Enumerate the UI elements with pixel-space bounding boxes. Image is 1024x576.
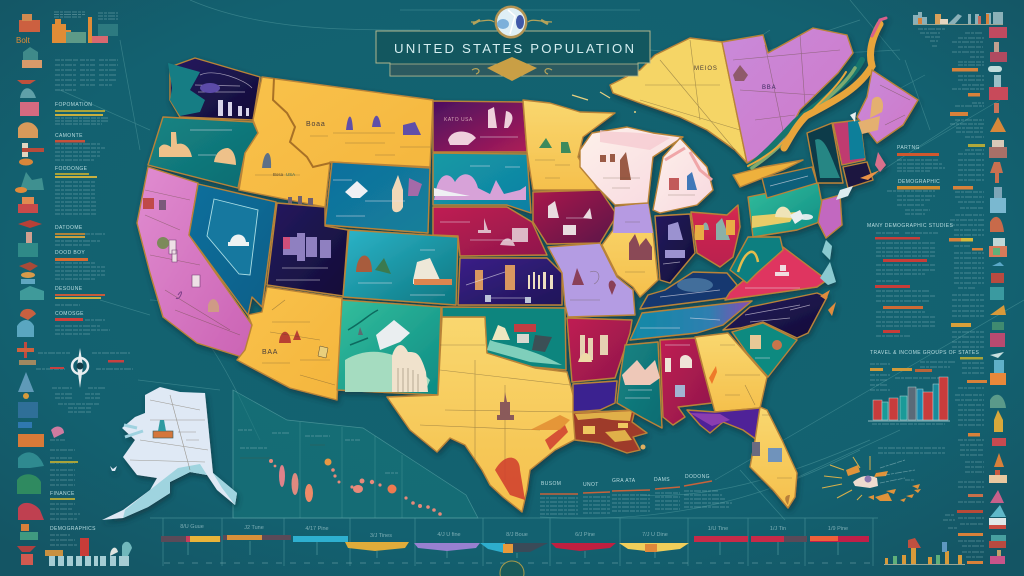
- icon: white block: [989, 518, 1006, 529]
- lower-right mini bars: [884, 515, 965, 564]
- icon: pink building: [989, 27, 1007, 38]
- map of the states: [137, 18, 918, 512]
- icon: blue peak: [18, 372, 34, 392]
- diagonal statistics text: [540, 474, 732, 514]
- timeline labels: 1/9 Pine: [828, 526, 848, 532]
- timeline labels: 8/U Guue: [180, 524, 204, 530]
- Connecticut: [843, 162, 873, 188]
- North Dakota label: KATO USA: [444, 117, 473, 123]
- text block 9: [50, 526, 96, 545]
- Kansas: [458, 258, 562, 305]
- top skyline chart: [52, 12, 118, 43]
- Kentucky: [640, 272, 737, 309]
- text block 2: [55, 133, 105, 160]
- Nevada: [189, 184, 276, 315]
- Northeastern pink region: [722, 28, 853, 163]
- main heading: UNITED STATES POPULATION: [394, 41, 634, 56]
- panel: Puerto Rico cluster: [822, 448, 945, 502]
- title diamond ornament: [487, 57, 537, 81]
- icon: olive and teal: [20, 524, 38, 540]
- icon: red orange: [990, 217, 1004, 232]
- text block 4: DATOOME: [55, 225, 83, 231]
- cluster caption: [878, 448, 945, 453]
- timeline labels: 4/J U fine: [437, 532, 461, 538]
- note bar 2: [897, 186, 940, 190]
- Lake island: [790, 210, 804, 224]
- text block 2: CAMONTE: [55, 133, 83, 139]
- Arizona: [237, 287, 342, 400]
- demographics table: [875, 233, 938, 336]
- text block 4: [55, 225, 105, 245]
- text block 8: [50, 491, 80, 519]
- icon: small stack: [994, 103, 999, 113]
- orange highlight tags: [949, 68, 987, 564]
- icon: orange saucer: [19, 158, 33, 166]
- icon: orange mound: [990, 117, 1006, 132]
- note heading 2: DEMOGRAPHIC: [898, 179, 940, 185]
- northern label: MEIOS: [694, 66, 718, 72]
- Oregon: [148, 117, 258, 188]
- title globe: [494, 6, 528, 38]
- Vermont dark panel: [807, 123, 843, 183]
- left text column: [36, 12, 133, 566]
- diagonal statistics text: GRA ATA: [612, 478, 636, 484]
- Washington: [168, 58, 260, 120]
- icon: pink and green: [989, 238, 1007, 257]
- Illinois: [602, 203, 658, 297]
- icon: teal and red: [989, 535, 1006, 548]
- Minnesota: [523, 100, 615, 190]
- timeline labels: 4/17 Pine: [305, 526, 329, 532]
- Idaho and Montana: Bosa: [273, 172, 284, 177]
- Montana label: Boaa: [306, 121, 326, 128]
- Florida panhandle: [687, 408, 760, 440]
- Tennessee: [630, 301, 752, 340]
- New York strip: [733, 160, 817, 198]
- icon: pink peak: [990, 490, 1004, 503]
- bars: [873, 377, 948, 420]
- Colorado: [343, 230, 458, 305]
- top-right skyline: [913, 12, 1003, 46]
- compass rose: [72, 348, 88, 388]
- icon: mixed colour block: [18, 452, 44, 468]
- text block 1: FOPOMATION: [55, 102, 92, 108]
- North Carolina: [723, 293, 827, 338]
- icon: red stack: [18, 197, 38, 213]
- Great Lakes island details: [572, 92, 636, 113]
- Alaska label: [153, 420, 199, 440]
- icon: red saucer: [17, 80, 36, 84]
- bottom seal: [500, 561, 524, 576]
- timeline strip: [150, 518, 878, 576]
- icon: blue and orange: [990, 360, 1006, 385]
- Northern yellow region: [610, 38, 747, 163]
- panel: demographics notes: [867, 145, 953, 336]
- timeline labels: 3/J Tines: [370, 533, 392, 539]
- icon: blue saucer: [992, 262, 1004, 266]
- diagonal statistics text: BUSOM: [541, 481, 561, 487]
- body text lines: [950, 33, 984, 557]
- icon: orange building: Bolt: [16, 36, 31, 45]
- icon: pink monument: [990, 550, 1005, 564]
- South Dakota: [433, 153, 531, 213]
- North Dakota: [433, 101, 527, 152]
- Arkansas: [567, 318, 632, 382]
- text block 3: [55, 166, 97, 214]
- icon: red monument: [17, 546, 36, 565]
- Massachusetts: [833, 120, 865, 165]
- Florida: [750, 407, 797, 508]
- icon: blue block: [18, 422, 32, 428]
- St Lawrence colored bands: [748, 18, 886, 168]
- icon: red saucer 3: [19, 262, 38, 271]
- scroll ornaments: [471, 20, 552, 74]
- diagonal statistics text: DODONG: [685, 474, 710, 480]
- icon: pink and teal tower: [990, 42, 1007, 62]
- bottom skyline: [45, 538, 132, 566]
- Alabama: [660, 338, 712, 425]
- Michigan: [653, 138, 713, 213]
- icon: red and cream tower: [22, 143, 44, 157]
- timeline labels: 7/J U Dine: [642, 532, 668, 538]
- right text column: [884, 33, 987, 564]
- icon: red saucer: [992, 438, 1006, 446]
- Maine: [857, 70, 918, 143]
- Nebraska: [433, 207, 547, 256]
- northeastern label: BBA: [762, 85, 776, 91]
- text block 6: DESOUNE: [55, 286, 83, 292]
- West Virginia: [730, 237, 783, 283]
- Wyoming: [325, 162, 430, 233]
- title banner: [376, 6, 650, 81]
- text block 5: DOOD BOY: [55, 250, 85, 256]
- Georgia: [695, 333, 767, 412]
- bar chart: right column: [868, 350, 980, 424]
- timeline labels: [180, 524, 848, 539]
- text block 1: [55, 102, 108, 124]
- panel: Alaska: [102, 387, 237, 520]
- Utah: [267, 203, 348, 296]
- icon: orange building: [16, 14, 40, 45]
- icon: green and pink: [990, 322, 1005, 347]
- right icon column: [988, 27, 1008, 564]
- California: [137, 167, 252, 358]
- icon: yellow figure: [994, 410, 1003, 432]
- icon: white shape: [988, 66, 1002, 72]
- text block 7: [55, 311, 110, 334]
- note heading 1: PARTNG: [897, 145, 920, 151]
- icon: orange and teal: [21, 272, 35, 284]
- icon: teal dome: [990, 395, 1006, 408]
- timeline bars: [161, 535, 869, 553]
- Iowa: [533, 190, 617, 244]
- icon: orange panel: [18, 434, 44, 447]
- lower text blocks: [50, 426, 78, 485]
- icon: orange and white: [989, 470, 1007, 483]
- icon: pink block: [20, 102, 39, 116]
- Coastal islands: [820, 112, 886, 316]
- Wisconsin: [580, 127, 683, 205]
- note bar 1: [897, 153, 939, 156]
- icon: red stack 2: [18, 503, 44, 520]
- icon: red saucer 2: [18, 220, 42, 228]
- icon: teal block: [18, 232, 38, 257]
- text block 9: DEMOGRAPHICS: [50, 526, 96, 532]
- text block 3: FOODONGE: [55, 166, 88, 172]
- inset text: [238, 430, 398, 473]
- Missouri: [548, 243, 635, 317]
- timeline labels: 6/J Pine: [575, 532, 595, 538]
- Indiana: [655, 214, 695, 283]
- icon: teal hut: [20, 286, 44, 300]
- icon: orange flame: [20, 309, 36, 320]
- timeline labels: 1/U Tine: [708, 526, 728, 532]
- panel: Hawaii and Pacific inset: [233, 390, 478, 518]
- Pennsylvania: [748, 183, 825, 237]
- icon: red block: [991, 273, 1004, 283]
- Louisiana: [573, 381, 647, 453]
- Arizona label: BAA: [262, 349, 278, 356]
- timeline labels: 8/J Boue: [506, 532, 528, 538]
- New Mexico: [337, 300, 441, 395]
- text block 8: FINANCE: [50, 491, 75, 497]
- diagonal statistics text: DAMS: [654, 477, 670, 483]
- compass captions: [36, 353, 133, 412]
- Virginia: [725, 247, 827, 300]
- icon: orange tower: [18, 393, 38, 418]
- timeline labels: J2 Tune: [244, 525, 264, 531]
- text block 5: [55, 250, 105, 279]
- icon: orange dome: [994, 453, 1004, 467]
- icon: blue dome: [17, 320, 34, 337]
- South Carolina: [732, 323, 797, 377]
- icon: teal peak: [990, 505, 1006, 517]
- timeline labels: 1/J Tin: [770, 526, 786, 532]
- icon: teal and orange cluster: [15, 172, 44, 193]
- icon: brown building: [989, 140, 1007, 158]
- icon: teal dome: [20, 88, 36, 98]
- icon: teal house: [22, 47, 42, 68]
- New Jersey and Delaware: [818, 195, 842, 238]
- table block: [55, 60, 118, 90]
- icon: red tower: [989, 75, 1008, 100]
- icon: blue block: [990, 187, 1006, 213]
- icon: teal block: [990, 287, 1004, 300]
- diagonal statistics text: UNOT: [583, 482, 599, 488]
- Idaho and Montana: USA: [286, 172, 295, 177]
- islands: [269, 458, 442, 516]
- Mississippi: [617, 342, 662, 428]
- text block 7: COMOSGE: [55, 311, 84, 317]
- icon: green tree: [17, 474, 41, 494]
- table heading: MANY DEMOGRAPHIC STUDIES: [867, 223, 953, 229]
- icon: orange tower: [990, 162, 1003, 183]
- left icon column: [15, 14, 44, 565]
- chart heading: TRAVEL & INCOME GROUPS OF STATES: [870, 350, 980, 356]
- icon: red column: [17, 342, 36, 365]
- icon: white wave: [990, 352, 1004, 358]
- icon: orange mound 2: [990, 305, 1006, 315]
- Oklahoma: [442, 307, 566, 370]
- text block 6: [55, 286, 105, 305]
- Ohio: [691, 205, 740, 267]
- icon: orange dome: [18, 122, 38, 138]
- Idaho and Montana: [239, 77, 433, 207]
- Texas: [387, 317, 578, 512]
